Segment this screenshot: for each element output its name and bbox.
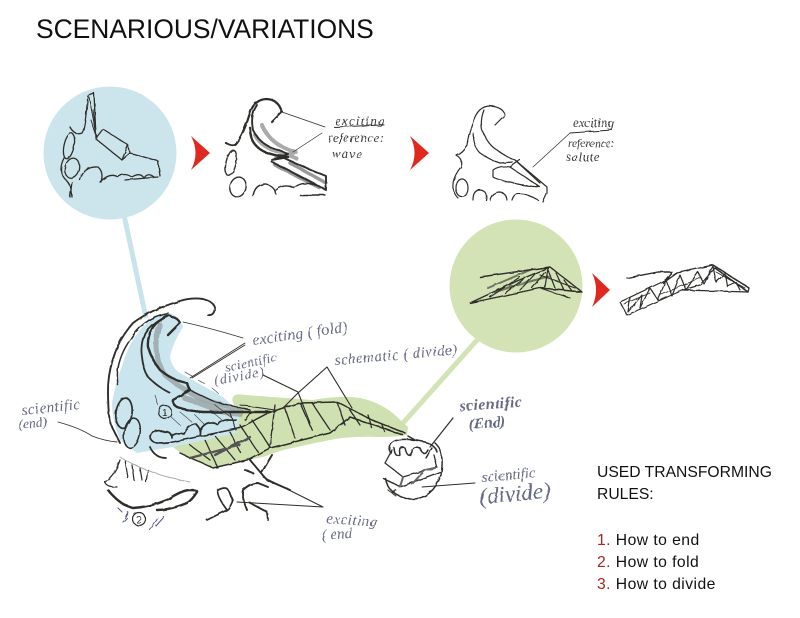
panel: main annotated sketch <box>18 298 552 544</box>
sketch: wave form <box>223 99 326 199</box>
note: scientific (end) left: scientific <box>21 397 81 419</box>
list of rules: 1. How to end <box>597 532 700 549</box>
handwritten annotations <box>18 319 552 544</box>
note: schematic (divide): schematic ( divide) <box>334 342 459 369</box>
note: scientific (divide): scientific <box>224 349 278 375</box>
sketch: wave outline with fold: 1 <box>162 408 168 419</box>
note: exciting (end) <box>321 511 378 544</box>
blue connector line <box>124 215 146 318</box>
note: exciting (fold): exciting ( fold) <box>251 319 349 349</box>
handwritten note: exciting, reference salute: reference: <box>568 138 614 150</box>
green circle <box>450 220 582 352</box>
blue circle <box>44 86 176 220</box>
panel: sketch salute variation <box>453 106 615 202</box>
sketch: initial folded form <box>61 93 160 197</box>
list of rules <box>597 532 716 593</box>
note: scientific (divide): (divide) <box>213 365 266 389</box>
green connector line <box>403 339 478 423</box>
sketch: truss through green area <box>168 402 405 468</box>
sketch: end sphere <box>383 436 442 499</box>
note: scientific (end) right <box>458 394 523 433</box>
handwritten note: exciting, reference wave <box>328 113 386 161</box>
note: scientific (end) right: (End) <box>468 413 506 433</box>
note: scientific (end) left <box>18 397 81 432</box>
sketch: refined truss <box>620 265 749 315</box>
handwritten note: exciting, reference salute: exciting <box>573 115 615 130</box>
note: scientific (divide) right: scientific <box>481 465 537 486</box>
list of rules: 3. How to divide <box>597 576 716 593</box>
sketch: lower wave ending: 2 <box>136 515 142 526</box>
handwritten note: exciting, reference salute <box>566 115 615 164</box>
text block: used transforming rules <box>597 464 772 593</box>
handwritten note: exciting, reference wave: wave <box>332 146 363 161</box>
sketch: blue hatching <box>155 372 232 425</box>
note: exciting (end): ( end <box>321 526 353 544</box>
leader lines for annotations <box>58 322 475 507</box>
blue highlight shape <box>112 313 240 453</box>
sketch: dense truss <box>470 267 582 303</box>
leader lines <box>282 112 325 152</box>
panel: green circle with truss sketch <box>450 220 582 352</box>
title: SCENARIOUS/VARIATIONS <box>36 14 374 44</box>
note: scientific (end) left: (end) <box>18 414 48 432</box>
note: scientific (divide) right: (divide) <box>478 478 552 509</box>
heading: USED TRANSFORMING <box>597 464 772 481</box>
leader line <box>533 133 570 167</box>
green highlight shape <box>173 394 408 468</box>
panel: sketch wave variation <box>223 99 386 199</box>
sketch: wave outline with fold <box>108 298 270 458</box>
list of rules: 2. How to fold <box>597 554 699 571</box>
handwritten note: exciting, reference salute: salute <box>566 149 600 164</box>
note: exciting (end): exciting <box>326 511 378 531</box>
handwritten note: exciting, reference wave: exciting <box>335 113 386 128</box>
handwritten note: exciting, reference wave: reference: <box>328 130 384 145</box>
note: scientific (end) right: scientific <box>458 394 523 415</box>
sketch: lower wave ending <box>105 455 290 530</box>
heading: RULES: <box>597 486 654 503</box>
arrow: third red chevron <box>592 273 610 307</box>
panel: blue circle with first sketch <box>44 86 176 220</box>
heading <box>597 464 772 503</box>
sketch: salute form <box>453 106 547 202</box>
note: scientific (divide) <box>213 349 278 389</box>
arrow: second red chevron <box>410 136 429 170</box>
arrow: first red chevron <box>191 136 210 170</box>
